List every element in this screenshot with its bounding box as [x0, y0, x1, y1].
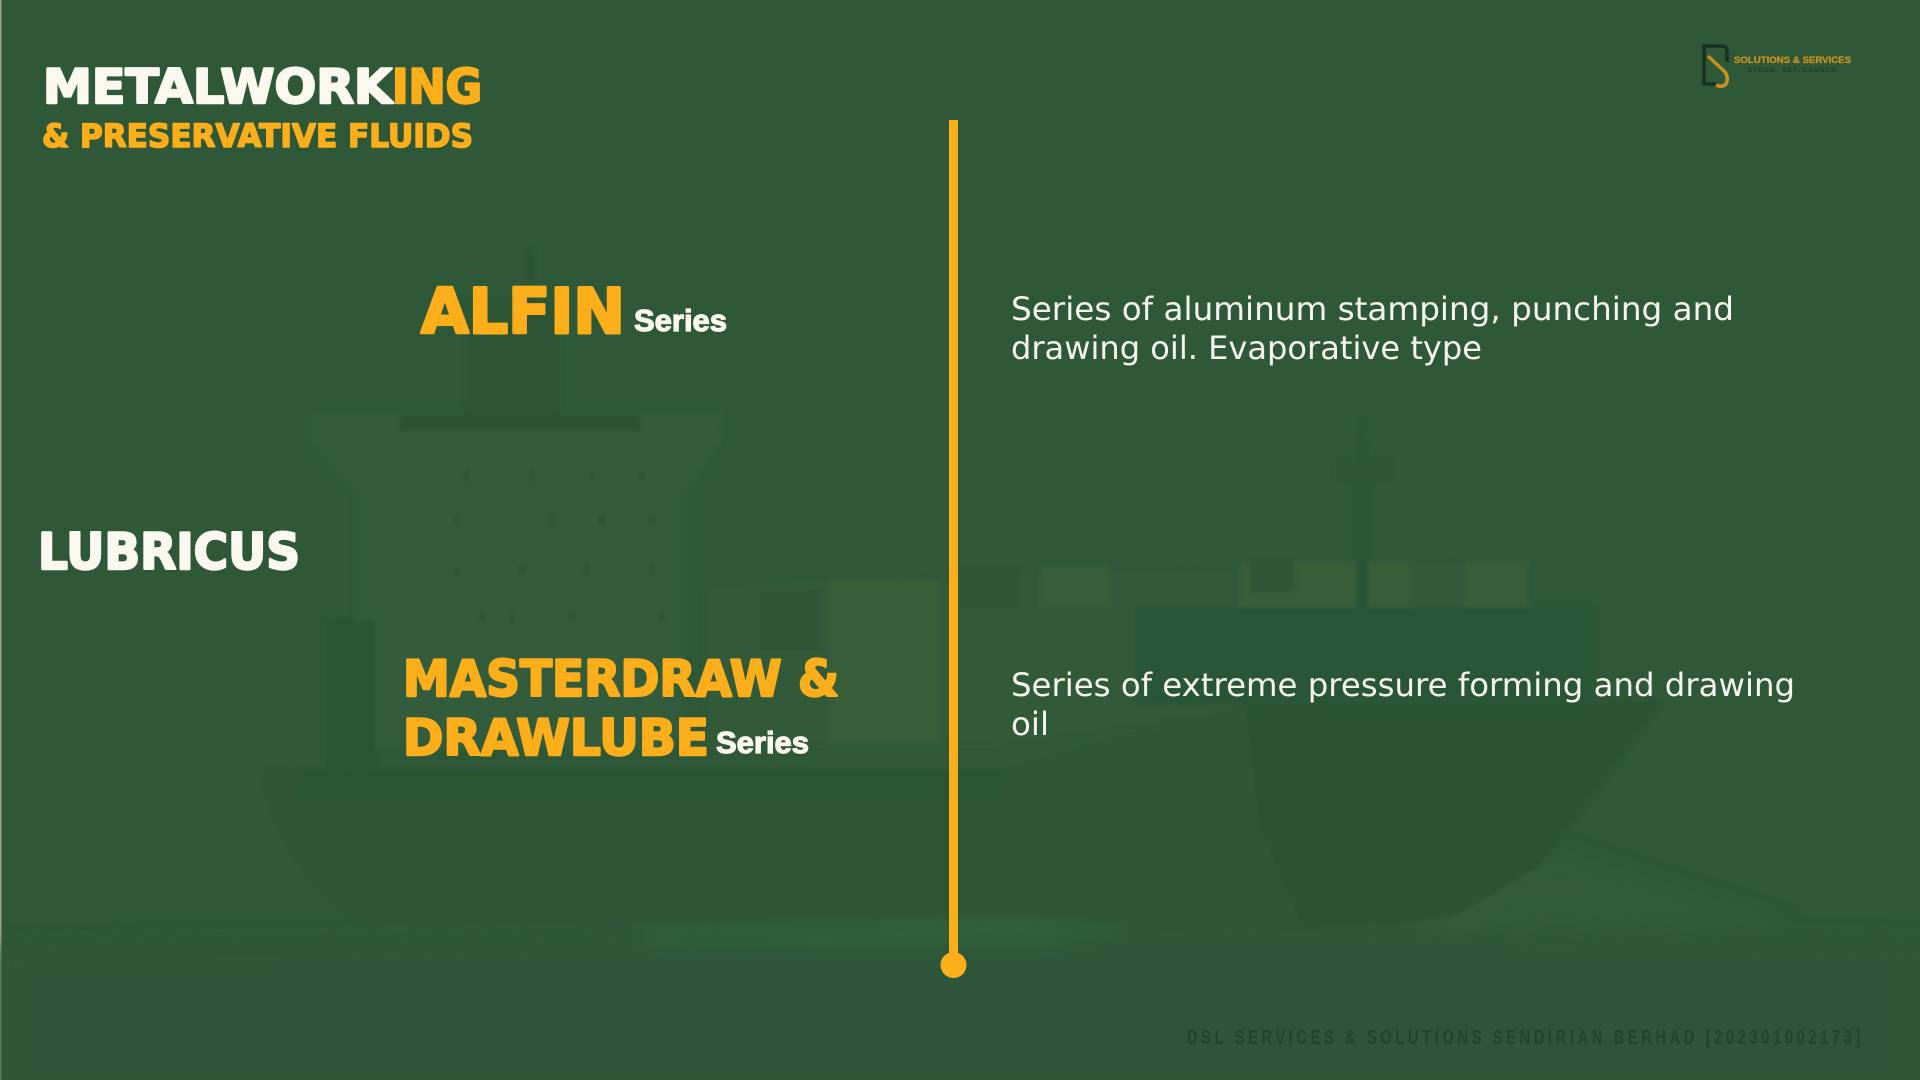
Series label: Series: [716, 725, 809, 760]
brand name: LUBRICUS: LUBRICUS: [38, 523, 300, 581]
background: container ship silhouette: [0, 250, 1920, 1080]
title line 1: orange part: ING: [392, 60, 482, 115]
MASTERDRAW description: [1011, 666, 1795, 743]
containers: [705, 561, 1528, 745]
end dot: [940, 952, 966, 978]
description line 1: Series of extreme pressure forming and drawing: [1011, 666, 1795, 704]
timeline line with end dot: [940, 120, 966, 978]
title: [42, 60, 482, 155]
sea band: [0, 850, 1920, 1080]
logo: [1704, 46, 1851, 86]
ALFIN name: ALFIN: [421, 275, 625, 348]
product: ALFIN series: [421, 275, 727, 348]
title line 2: & PRESERVATIVE FLUIDS: [42, 117, 473, 155]
ALFIN description: [1011, 290, 1734, 367]
hull: [263, 702, 1661, 928]
title line 1: white part: METALWORK: [43, 60, 394, 115]
logo mark: [1704, 46, 1727, 86]
vertical line: [949, 120, 958, 965]
MASTERDRAW name: MASTERDRAW &: [403, 650, 839, 708]
superstructure: [355, 440, 686, 750]
product: MASTERDRAW & DRAWLUBE series: [403, 650, 839, 767]
description line 2: drawing oil. Evaporative type: [1011, 329, 1482, 367]
description line 1: Series of aluminum stamping, punching and: [1011, 290, 1734, 328]
description line 2: oil: [1011, 705, 1049, 743]
logo tagline: STEAM. SET. LAUNCH: [1748, 67, 1836, 74]
DRAWLUBE name: DRAWLUBE: [403, 709, 709, 767]
logo name: SOLUTIONS & SERVICES: [1734, 55, 1851, 66]
bow mast: [1356, 420, 1368, 610]
Series label: Series: [634, 303, 727, 338]
